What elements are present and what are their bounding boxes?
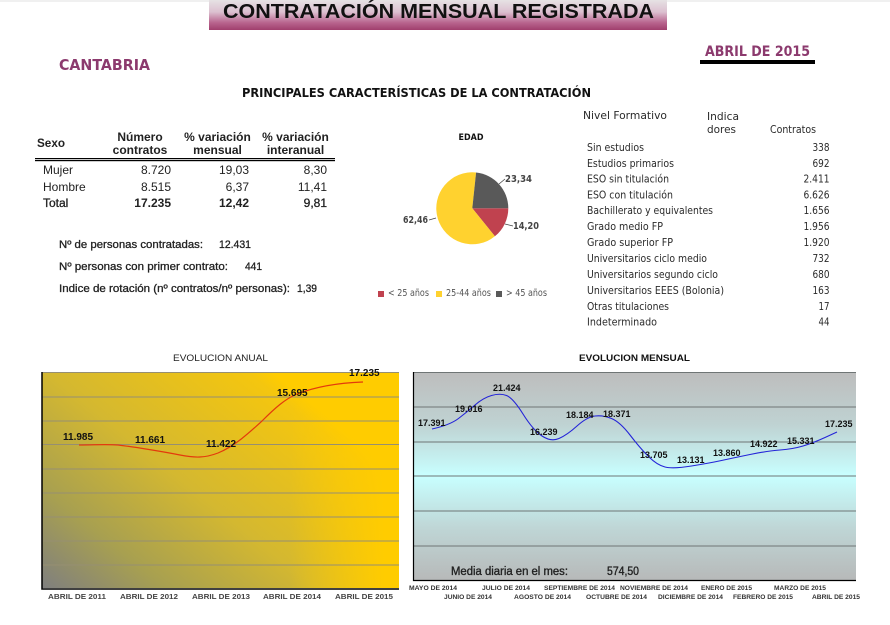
table: nivel formativo: 1.920 <box>804 236 830 249</box>
table: contracts by sex: contratos <box>113 143 168 157</box>
chart: evolucion mensual: 18.371 <box>603 409 630 419</box>
table: nivel formativo: Bachillerato y equivalentes <box>587 204 713 217</box>
table: contracts by sex: Mujer <box>43 163 73 177</box>
title banner: CONTRATACIÓN MENSUAL REGISTRADA <box>223 0 654 23</box>
chart: evolucion mensual: MARZO DE 2015 <box>774 585 826 592</box>
table: contracts by sex: Número <box>117 130 163 144</box>
table: nivel formativo: Indeterminado <box>587 316 657 328</box>
table: nivel formativo: Grado superior FP <box>587 236 673 249</box>
chart: evolucion mensual: 14.922 <box>750 439 778 449</box>
table: nivel formativo: 163 <box>812 284 830 297</box>
chart: evolucion anual: 11.661 <box>135 435 165 446</box>
table: nivel formativo: 680 <box>812 268 830 281</box>
chart: evolucion anual: EVOLUCION ANUAL <box>173 353 268 363</box>
table: contracts by sex: mensual <box>193 143 242 157</box>
key figures: Nº de personas contratadas: <box>59 239 203 251</box>
table: contracts by sex <box>35 130 335 210</box>
table: nivel formativo: Universitarios segundo ciclo <box>587 268 718 281</box>
key figures: 441 <box>245 261 262 273</box>
table: nivel formativo: Sin estudios <box>587 141 644 154</box>
chart: evolucion mensual: AGOSTO DE 2014 <box>514 594 571 601</box>
table: nivel formativo: ESO con titulación <box>587 188 673 202</box>
pie legend: < 25 años <box>388 288 429 299</box>
pie chart: edad: 14,20 <box>513 221 539 232</box>
chart: evolucion mensual: MAYO DE 2014 <box>409 585 457 592</box>
table: nivel formativo: 338 <box>812 141 830 154</box>
table: contracts by sex: Total <box>43 196 68 210</box>
table: nivel formativo: Estudios primarios <box>587 157 674 170</box>
table: contracts by sex: interanual <box>267 143 324 157</box>
chart: evolucion mensual: JULIO DE 2014 <box>482 585 530 592</box>
table: nivel formativo: Universitarios ciclo medio <box>587 252 707 265</box>
table: nivel formativo: 1.656 <box>804 204 830 217</box>
pie chart: edad: 62,46 <box>403 215 428 226</box>
table: contracts by sex: 19,03 <box>219 163 249 177</box>
chart: evolucion mensual: 17.235 <box>825 419 852 429</box>
chart: evolucion mensual: JUNIO DE 2014 <box>444 594 492 601</box>
table: contracts by sex: 17.235 <box>134 196 171 210</box>
table: nivel formativo: 17 <box>818 300 830 313</box>
chart: evolucion mensual: 15.331 <box>787 436 814 446</box>
pie legend <box>378 288 547 299</box>
region heading: CANTABRIA <box>59 56 150 74</box>
chart: evolucion anual: ABRIL DE 2013 <box>192 594 250 601</box>
chart: evolucion mensual: ABRIL DE 2015 <box>812 594 860 601</box>
chart: evolucion mensual: 21.424 <box>493 383 521 393</box>
key figures <box>59 239 317 295</box>
chart: evolucion mensual: 13.860 <box>713 448 740 458</box>
chart: evolucion anual: 15.695 <box>277 388 308 399</box>
table: nivel formativo: Contratos <box>770 123 816 136</box>
table: nivel formativo: 1.956 <box>804 220 830 233</box>
key figures: 1,39 <box>297 283 317 295</box>
pie chart: edad: EDAD <box>458 133 484 143</box>
chart: evolucion anual: ABRIL DE 2011 <box>48 594 106 601</box>
chart: evolucion anual: 11.985 <box>63 432 93 443</box>
pie chart: edad <box>403 133 539 244</box>
chart: evolucion mensual: ENERO DE 2015 <box>701 585 752 592</box>
table: nivel formativo: ESO sin titulación <box>587 172 669 186</box>
table: nivel formativo: Otras titulaciones <box>587 300 669 313</box>
key figures: Nº personas con primer contrato: <box>59 261 228 273</box>
table: nivel formativo: 44 <box>818 316 830 328</box>
table: contracts by sex: 8.720 <box>141 163 171 177</box>
table: contracts by sex: 9,81 <box>304 196 327 210</box>
table: nivel formativo <box>583 109 830 328</box>
table: contracts by sex: % variación <box>262 130 329 144</box>
chart: evolucion mensual: 19.016 <box>455 404 482 414</box>
table: nivel formativo: 692 <box>812 157 830 170</box>
table: nivel formativo: dores <box>707 123 736 136</box>
chart: evolucion mensual: NOVIEMBRE DE 2014 <box>620 585 688 592</box>
table: contracts by sex: 11,41 <box>298 180 327 194</box>
table: nivel formativo: Indica <box>707 110 739 123</box>
chart: evolucion mensual: 13.705 <box>640 450 668 460</box>
chart: evolucion mensual: 574,50 <box>607 566 639 578</box>
chart: evolucion mensual: EVOLUCION MENSUAL <box>579 353 691 363</box>
chart: evolucion mensual <box>409 353 860 601</box>
title banner <box>209 0 667 30</box>
chart: evolucion mensual: 16.239 <box>530 427 558 437</box>
chart: evolucion mensual: FEBRERO DE 2015 <box>733 594 793 601</box>
table: nivel formativo: 2.411 <box>804 172 830 186</box>
pie chart: edad: 23,34 <box>505 174 532 185</box>
table: contracts by sex: 8.515 <box>141 180 171 194</box>
chart: evolucion anual: ABRIL DE 2014 <box>263 594 321 601</box>
table: nivel formativo: 6.626 <box>804 188 830 202</box>
table: nivel formativo: Grado medio FP <box>587 220 663 233</box>
table: contracts by sex: 6,37 <box>226 180 249 194</box>
pie legend: > 45 años <box>506 288 547 299</box>
table: nivel formativo: Nivel Formativo <box>583 109 667 122</box>
section heading: PRINCIPALES CARACTERÍSTICAS DE LA CONTRATACIÓN <box>242 85 591 100</box>
table: nivel formativo: 732 <box>812 252 830 265</box>
chart: evolucion mensual: 17.391 <box>418 418 446 428</box>
table: contracts by sex: 8,30 <box>304 163 327 177</box>
chart: evolucion mensual: 18.184 <box>566 410 594 420</box>
date heading: ABRIL DE 2015 <box>705 44 810 60</box>
chart: evolucion mensual: OCTUBRE DE 2014 <box>586 594 647 601</box>
chart: evolucion mensual: Media diaria en el mes: <box>451 566 568 578</box>
table: contracts by sex: Hombre <box>43 180 86 194</box>
chart: evolucion anual <box>42 353 399 601</box>
chart: evolucion mensual: DICIEMBRE DE 2014 <box>658 594 723 601</box>
table: nivel formativo: Universitarios EEES (Bolonia) <box>587 284 724 297</box>
table: contracts by sex: Sexo <box>37 136 65 150</box>
chart: evolucion mensual: 13.131 <box>677 455 704 465</box>
chart: evolucion anual: 17.235 <box>349 368 380 379</box>
chart: evolucion anual: ABRIL DE 2012 <box>120 594 178 601</box>
chart: evolucion anual: 11.422 <box>206 439 236 450</box>
pie legend: 25-44 años <box>446 288 491 299</box>
table: contracts by sex: 12,42 <box>219 196 249 210</box>
table: contracts by sex: % variación <box>184 130 251 144</box>
key figures: Indice de rotación (nº contratos/nº personas): <box>59 283 290 295</box>
chart: evolucion anual: ABRIL DE 2015 <box>335 594 393 601</box>
chart: evolucion mensual: SEPTIEMBRE DE 2014 <box>544 585 615 592</box>
key figures: 12.431 <box>219 239 251 251</box>
